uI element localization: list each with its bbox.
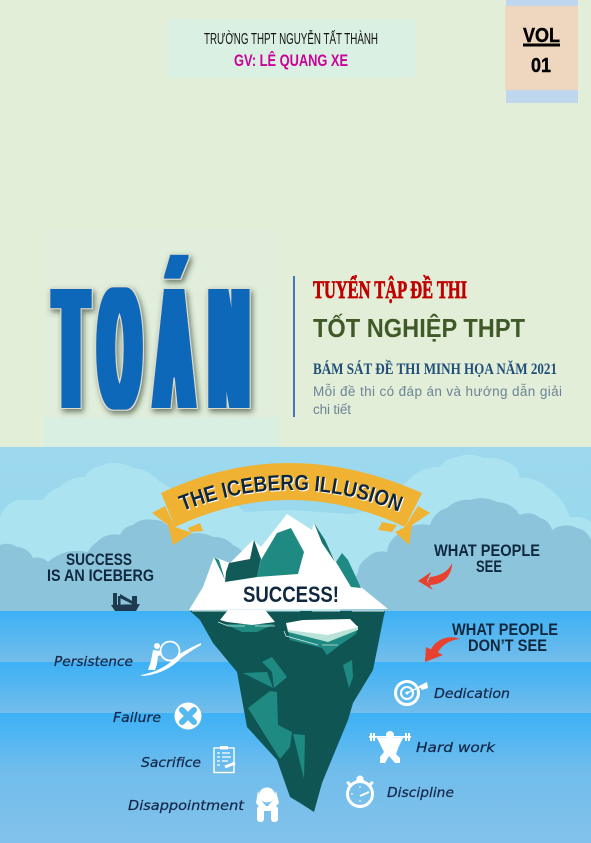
volume badge <box>505 0 578 103</box>
teacher name: GV: LÊ QUANG XE <box>234 51 348 70</box>
caption: success is an iceberg: IS AN ICEBERG <box>47 567 154 585</box>
banner right tail <box>395 506 430 545</box>
description: Mỗi đề thi có đáp án và hướng dẫn giải <box>313 384 562 399</box>
iceberg rock faces <box>214 523 361 588</box>
light clouds <box>0 455 591 611</box>
label: dedication: Dedication <box>434 686 510 702</box>
icon: discipline <box>346 776 374 806</box>
arrow: see <box>418 563 452 590</box>
icon: persistence <box>141 642 201 676</box>
banner left tail <box>152 506 192 545</box>
icon: failure <box>174 702 202 730</box>
caption: what people see: WHAT PEOPLE <box>434 542 540 560</box>
label: sacrifice: Sacrifice <box>141 755 201 771</box>
school name: TRƯỜNG THPT NGUYỄN TẤT THÀNH <box>204 29 378 48</box>
iceberg underwater body <box>190 611 385 812</box>
icon: disappointment <box>256 788 279 822</box>
icon: hard work <box>369 731 411 763</box>
caption: what people don't see <box>452 621 558 655</box>
iceberg <box>189 514 388 812</box>
caption: what people see <box>434 542 540 576</box>
banner ribbon <box>161 463 422 527</box>
water bands <box>0 611 591 662</box>
subject word TOÁN: TOÁN <box>56 252 247 445</box>
label: failure: Failure <box>113 710 161 726</box>
underwater facets <box>243 657 353 779</box>
heading red: TUYỂN TẬP ĐỀ THI <box>313 275 467 304</box>
school and teacher panel <box>168 19 415 78</box>
sky <box>0 447 591 612</box>
volume number: 01 <box>531 55 551 77</box>
panel: subject title <box>44 230 279 447</box>
icon: dedication <box>396 682 428 704</box>
label: persistence: Persistence <box>54 654 133 670</box>
dark clouds <box>0 519 247 611</box>
iceberg snow top <box>189 514 388 610</box>
caption: what people don't see: WHAT PEOPLE <box>452 621 558 639</box>
icon: ship <box>111 593 140 611</box>
heading green: TỐT NGHIỆP THPT <box>313 313 525 343</box>
caption: success is an iceberg: SUCCESS <box>66 551 132 569</box>
caption: what people see: SEE <box>476 558 502 576</box>
banner title: THE ICEBERG ILLUSION <box>178 474 404 512</box>
label: disappointment: Disappointment <box>128 798 245 814</box>
label: discipline: Discipline <box>387 785 454 801</box>
caption: success is an iceberg <box>47 551 154 585</box>
banner <box>152 463 430 545</box>
caption: what people don't see: DON’T SEE <box>468 637 547 655</box>
page background <box>0 0 591 447</box>
iceberg caption: SUCCESS! <box>243 582 339 607</box>
description <box>313 384 562 417</box>
icon: sacrifice <box>214 746 235 772</box>
arrow: don't see <box>425 637 460 662</box>
label: hard work: Hard work <box>416 740 496 756</box>
waterline dashes <box>192 610 384 612</box>
description: chi tiết <box>313 402 351 417</box>
volume label: VOL <box>523 25 560 47</box>
panel: iceberg illustration <box>0 447 591 843</box>
panel: exam description <box>293 275 562 417</box>
large ice floe right <box>284 619 358 655</box>
small ice floe left <box>218 610 275 632</box>
